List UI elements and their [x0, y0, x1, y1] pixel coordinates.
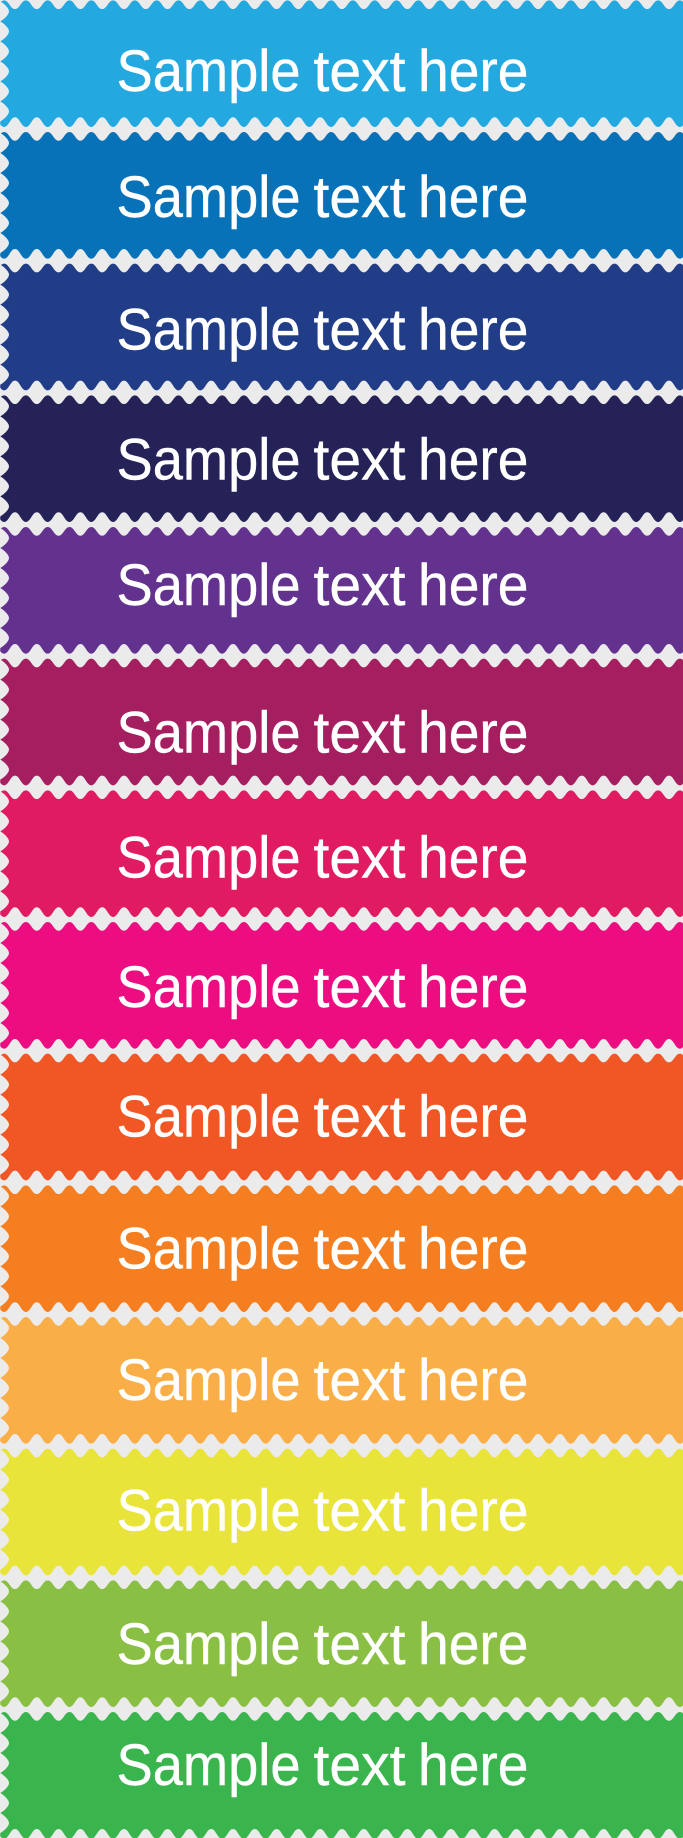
band 3 fill [0, 261, 683, 392]
band 13 label: here [418, 1612, 528, 1677]
band 1 label: Sample [116, 39, 300, 104]
band 14 label: Sample [116, 1733, 300, 1798]
band 3 label: text [314, 297, 406, 362]
band 14: green [0, 1709, 683, 1838]
band 10 label: text [314, 1217, 406, 1282]
band 5 label: Sample [116, 553, 300, 618]
band 11: light orange [0, 1314, 683, 1446]
band 10 label: Sample [116, 1217, 300, 1282]
band 7 fill [0, 787, 683, 919]
band 1 fill [0, 0, 683, 129]
band 12 label: text [314, 1479, 406, 1544]
band 6 label: text [314, 701, 406, 766]
band 2 fill [0, 129, 683, 261]
band 12 label: Sample [116, 1479, 300, 1544]
band 11 label: text [314, 1348, 406, 1413]
band 9 fill [0, 1051, 683, 1182]
band 12 label: here [418, 1479, 528, 1544]
band 6 label: here [418, 701, 528, 766]
band 1 label: text [314, 39, 406, 104]
band 12: yellow [0, 1446, 683, 1577]
band 13 label: Sample [116, 1612, 300, 1677]
band 2: blue [0, 129, 683, 261]
band 14 label: text [314, 1733, 406, 1798]
band 2 label: here [418, 165, 528, 230]
band 11 label: Sample [116, 1348, 300, 1413]
band 7 label: text [314, 826, 406, 891]
band 9 label: text [314, 1085, 406, 1150]
band 10: orange [0, 1182, 683, 1314]
band 3 label: Sample [116, 297, 300, 362]
band 5 fill [0, 524, 683, 656]
band 2 label: Sample [116, 165, 300, 230]
band 1: light blue [0, 0, 683, 129]
band 5: purple [0, 524, 683, 656]
band 12 fill [0, 1446, 683, 1577]
band 10 fill [0, 1182, 683, 1314]
band 5 label: text [314, 553, 406, 618]
band 10 label: here [418, 1217, 528, 1282]
band 3 label: here [418, 297, 528, 362]
scalloped left edge [0, 0, 9, 1838]
band 11 label: here [418, 1348, 528, 1413]
band 8 label: here [418, 955, 528, 1020]
band 8 label: text [314, 955, 406, 1020]
band 5 label: here [418, 553, 528, 618]
band 1 label: here [418, 39, 528, 104]
band 4 label: Sample [116, 427, 300, 492]
band 14 fill [0, 1709, 683, 1838]
band 6: plum [0, 656, 683, 787]
band 11 fill [0, 1314, 683, 1446]
band 9 label: Sample [116, 1085, 300, 1150]
band 8 fill [0, 919, 683, 1051]
band 13 fill [0, 1577, 683, 1709]
band 7: crimson pink [0, 787, 683, 919]
band 2 label: text [314, 165, 406, 230]
band 7 label: Sample [116, 826, 300, 891]
band 13: lime green [0, 1577, 683, 1709]
band 6 label: Sample [116, 701, 300, 766]
band 13 label: text [314, 1612, 406, 1677]
band 3: royal blue [0, 261, 683, 392]
band 9: red orange [0, 1051, 683, 1182]
band 4 label: text [314, 427, 406, 492]
band 7 label: here [418, 826, 528, 891]
band 4: navy [0, 392, 683, 524]
band 4 label: here [418, 427, 528, 492]
band 14 label: here [418, 1733, 528, 1798]
band 4 fill [0, 392, 683, 524]
band 8 label: Sample [116, 955, 300, 1020]
band 9 label: here [418, 1085, 528, 1150]
band 8: magenta [0, 919, 683, 1051]
band 6 fill [0, 656, 683, 787]
